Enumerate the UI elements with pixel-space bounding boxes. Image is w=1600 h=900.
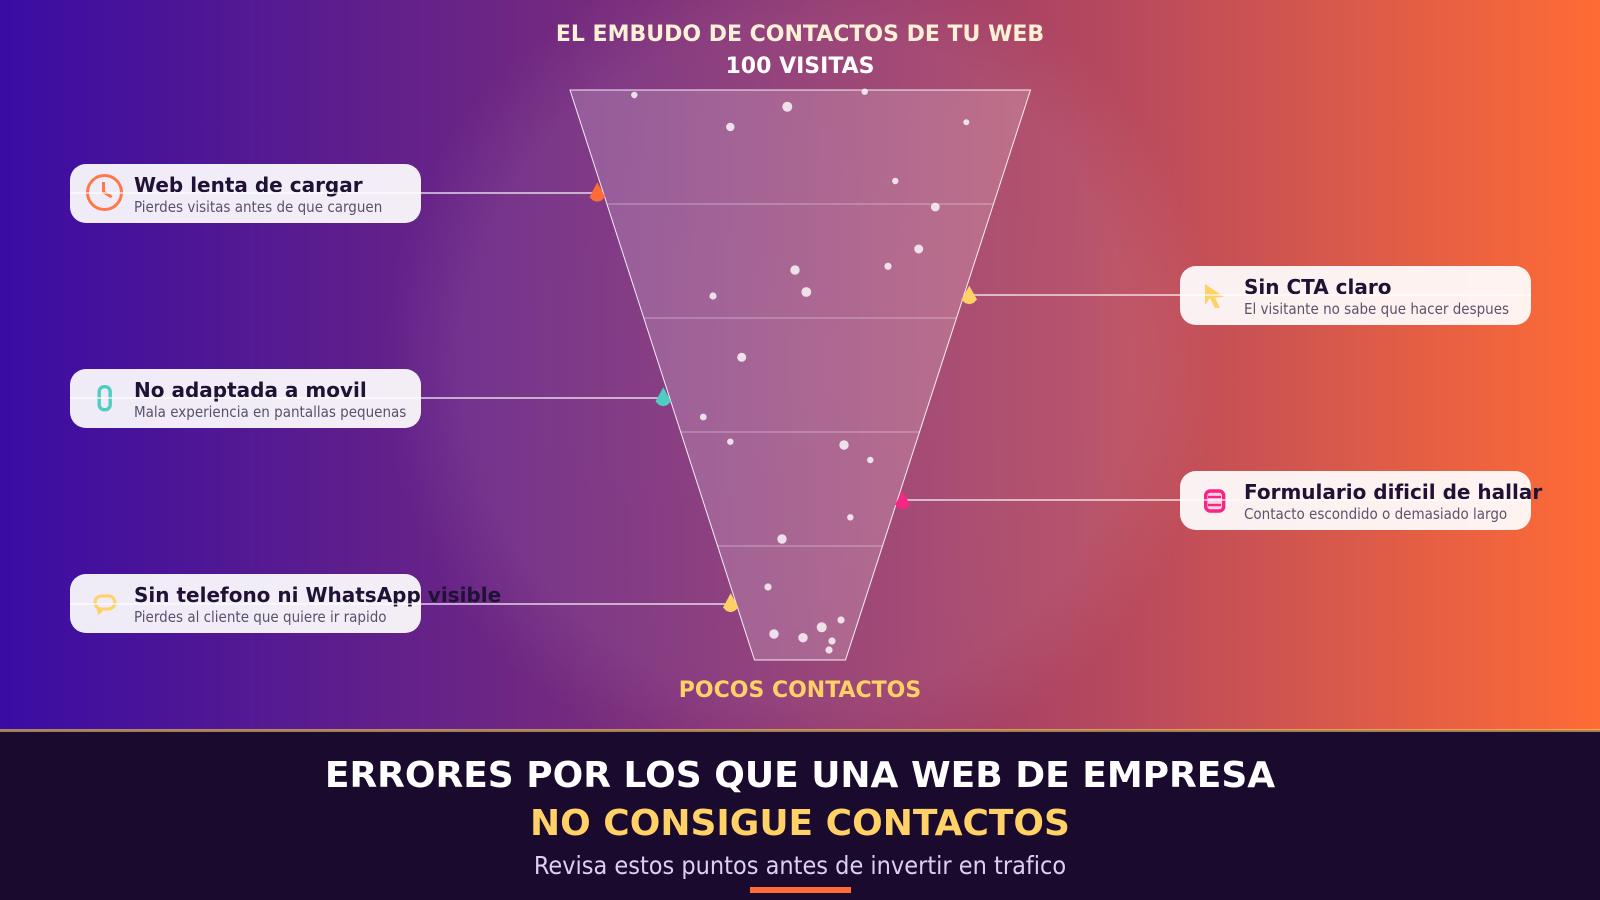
icon: chat bubble: [95, 596, 115, 616]
funnel exit label: POCOS CONTACTOS: [679, 678, 921, 703]
footer subtitle: Revisa estos puntos antes de invertir en trafico: [534, 851, 1066, 880]
card: formulario: Contacto escondido o demasiado largo: [1244, 505, 1507, 523]
card: formulario: Formulario dificil de hallar: [1244, 480, 1542, 504]
marker: yellow left: [723, 593, 738, 612]
funnel: [570, 90, 1030, 660]
card: sin cta: Sin CTA claro: [1244, 275, 1391, 299]
card: sin cta: [1180, 266, 1531, 325]
card: web lenta: [70, 164, 421, 223]
card: no adaptada: Mala experiencia en pantallas pequenas: [134, 403, 406, 421]
marker: pink: [895, 491, 910, 509]
connector lines: [70, 193, 1531, 604]
accent bar: [750, 887, 851, 893]
card: sin cta: El visitante no sabe que hacer despues: [1244, 300, 1509, 318]
card: sin telefono: Sin telefono ni WhatsApp visible: [134, 583, 501, 607]
footer highlight: NO CONSIGUE CONTACTOS: [530, 803, 1070, 844]
funnel heading: [556, 22, 1044, 79]
footer panel: [0, 729, 1600, 900]
marker: yellow right: [962, 286, 977, 304]
icon: clock: [88, 176, 122, 210]
card: formulario: [1180, 471, 1542, 530]
card: web lenta: Web lenta de cargar: [134, 173, 363, 197]
card: web lenta: Pierdes visitas antes de que carguen: [134, 198, 382, 216]
card: sin telefono: [70, 574, 501, 633]
marker: teal: [656, 387, 671, 406]
icon: form: [1206, 491, 1224, 511]
card: sin telefono: Pierdes al cliente que quiere ir rapido: [134, 608, 387, 626]
marker: orange: [590, 182, 605, 202]
funnel heading: 100 VISITAS: [726, 54, 874, 79]
icon: phone: [99, 387, 110, 410]
footer title: ERRORES POR LOS QUE UNA WEB DE EMPRESA: [325, 755, 1275, 796]
card: no adaptada: [70, 369, 421, 428]
icon: cursor: [1205, 284, 1224, 308]
funnel heading: EL EMBUDO DE CONTACTOS DE TU WEB: [556, 22, 1044, 47]
falling visitor dots: [631, 88, 969, 654]
card: no adaptada: No adaptada a movil: [134, 378, 367, 402]
